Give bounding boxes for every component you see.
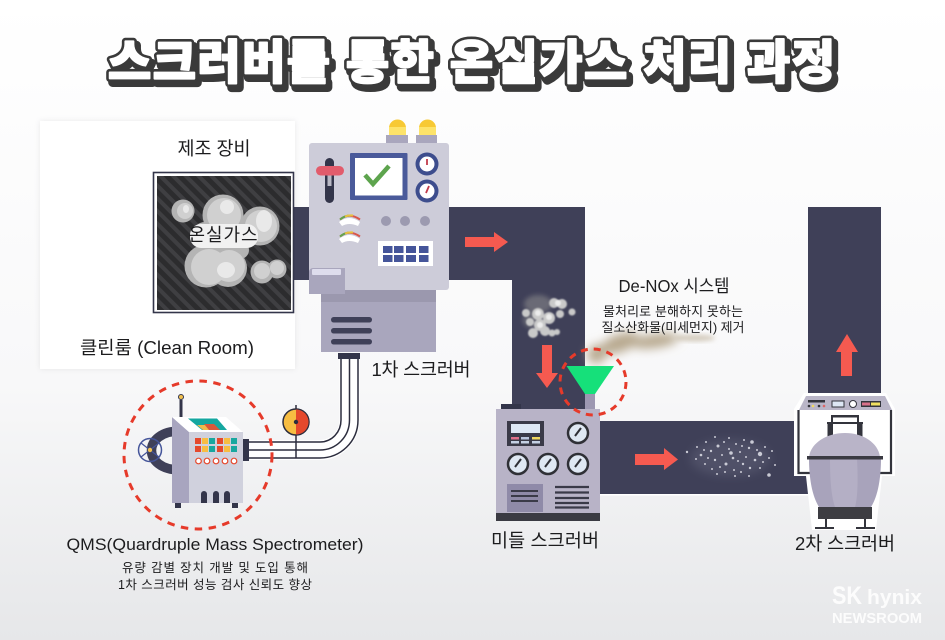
- lower housing: [321, 288, 436, 359]
- neck fittings: [827, 415, 863, 437]
- logo: SK hynix Newsroom: NEWSROOM: [832, 610, 922, 627]
- dial needles: [515, 428, 581, 467]
- right vent: [555, 487, 589, 508]
- logo: SK hynix Newsroom: SK: [832, 582, 862, 610]
- indicator dots: [381, 216, 430, 226]
- top screen: [188, 418, 227, 430]
- panel: clean room: [40, 121, 295, 369]
- ducts: [294, 207, 881, 494]
- keypad: [378, 241, 433, 266]
- De-NOx description: [602, 304, 744, 335]
- QMS dashed circle: [124, 381, 272, 529]
- pipe connector: [243, 439, 249, 461]
- label: greenhouse gas: 온실가스: [188, 225, 258, 245]
- first scrubber: [309, 120, 449, 359]
- logo: SK hynix Newsroom: [832, 582, 922, 627]
- De-NOx description: 질소산화물(미세먼지) 제거: [602, 320, 744, 335]
- small arc meters: [339, 215, 360, 243]
- lever: [316, 158, 344, 203]
- label: clean room: 클린룸 (Clean Room): [80, 338, 254, 358]
- title: 스크러버를 통한 온실가스 처리 과정: [111, 40, 838, 93]
- button grid: [195, 438, 237, 452]
- QMS description: 유량 감별 장치 개발 및 도입 통해: [122, 561, 308, 575]
- smoke in duct: [522, 295, 576, 338]
- logo: SK hynix Newsroom: hynix: [867, 587, 922, 609]
- round gauges: [416, 152, 438, 202]
- middle scrubber: [496, 404, 600, 521]
- De-NOx funnel: [566, 366, 614, 409]
- brown exhaust smoke: [584, 328, 715, 367]
- manufacturing chamber: [154, 172, 294, 312]
- display panel: [507, 421, 544, 446]
- label: De-NOx system: De-NOx 시스템: [618, 276, 730, 296]
- check monitor: [350, 153, 408, 200]
- handle and valve wheel: [138, 427, 182, 475]
- label: manufacturing equipment: 제조 장비: [178, 138, 250, 159]
- arrow: up: [836, 334, 858, 376]
- label: QMS: QMS(Quardruple Mass Spectrometer): [66, 535, 364, 554]
- title: 스크러버를 통한 온실가스 처리 과정: [108, 36, 835, 89]
- label: second scrubber: 2차 스크러버: [795, 533, 895, 554]
- De-NOx dashed circle: [560, 349, 626, 415]
- left vent: [507, 484, 543, 512]
- arrow: down: [536, 345, 558, 388]
- title: 스크러버를 통한 온실가스 처리 과정: [108, 36, 835, 89]
- cabinet: [172, 417, 189, 503]
- control panel body: [309, 143, 449, 290]
- corner tab: [309, 268, 345, 294]
- top control bar: [799, 396, 892, 410]
- cloud highlight band: [190, 224, 258, 248]
- label: first scrubber: 1차 스크러버: [372, 359, 470, 380]
- QMS machine: [138, 394, 249, 508]
- pipes to QMS: [248, 355, 358, 458]
- arrow: right lower: [635, 448, 678, 470]
- De-NOx description: 물처리로 분해하지 못하는: [603, 304, 743, 319]
- QMS description: 1차 스크러버 성능 검사 신뢰도 향상: [118, 578, 312, 592]
- QMS description: [118, 561, 312, 592]
- arched vents: [201, 491, 230, 503]
- pressure meter: [283, 405, 309, 458]
- label: middle scrubber: 미들 스크러버: [491, 530, 599, 551]
- vessel: [807, 433, 883, 528]
- fine particles: [686, 436, 776, 477]
- greenhouse gas cloud: [172, 194, 286, 288]
- round switches: [196, 458, 237, 464]
- lower duct highlight: [600, 494, 808, 496]
- arrow: right upper: [465, 232, 508, 252]
- white outline: [794, 393, 895, 530]
- second scrubber: [794, 393, 895, 530]
- feet: [175, 503, 238, 508]
- warning lights: [386, 120, 437, 143]
- dial gauges: [508, 423, 588, 474]
- antenna: [178, 394, 184, 417]
- frame: [798, 410, 891, 473]
